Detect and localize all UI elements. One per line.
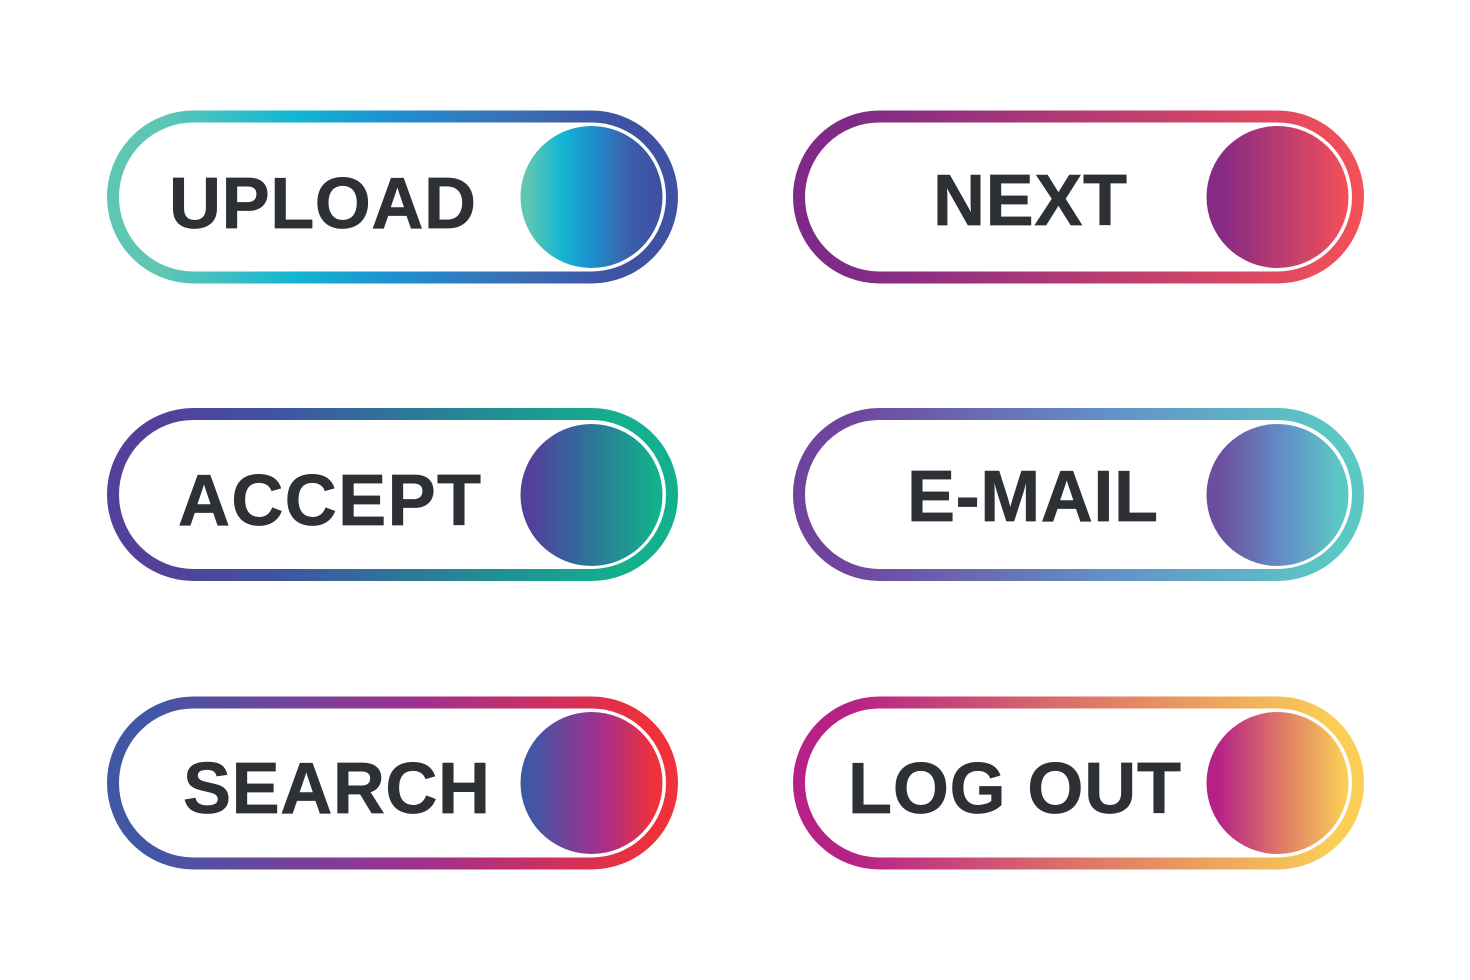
label: NEXT: NEXT	[933, 161, 1127, 241]
label: LOG OUT: LOG OUT	[848, 749, 1181, 829]
label: E-MAIL: E-MAIL	[907, 457, 1158, 537]
toggle knob: UPLOAD	[520, 126, 662, 268]
label: UPLOAD: UPLOAD	[169, 164, 476, 244]
button: LOG OUT	[799, 702, 1358, 864]
pill outline: SEARCH	[113, 702, 672, 864]
toggle knob: SEARCH	[520, 712, 662, 854]
toggle knob: LOG OUT	[1206, 712, 1348, 854]
button: UPLOAD	[113, 116, 672, 278]
button: NEXT	[799, 116, 1358, 278]
button: SEARCH	[113, 702, 672, 864]
pill outline: NEXT	[799, 116, 1358, 278]
pill outline: E-MAIL	[799, 414, 1358, 575]
button: ACCEPT	[113, 414, 672, 575]
toggle knob: E-MAIL	[1206, 424, 1348, 566]
toggle knob: ACCEPT	[520, 424, 662, 566]
pill outline: LOG OUT	[799, 702, 1358, 864]
pill outline: UPLOAD	[113, 116, 672, 278]
toggle knob: NEXT	[1206, 126, 1348, 268]
label: SEARCH: SEARCH	[183, 749, 490, 829]
button: E-MAIL	[799, 414, 1358, 575]
label: ACCEPT: ACCEPT	[178, 461, 481, 541]
pill outline: ACCEPT	[113, 414, 672, 575]
